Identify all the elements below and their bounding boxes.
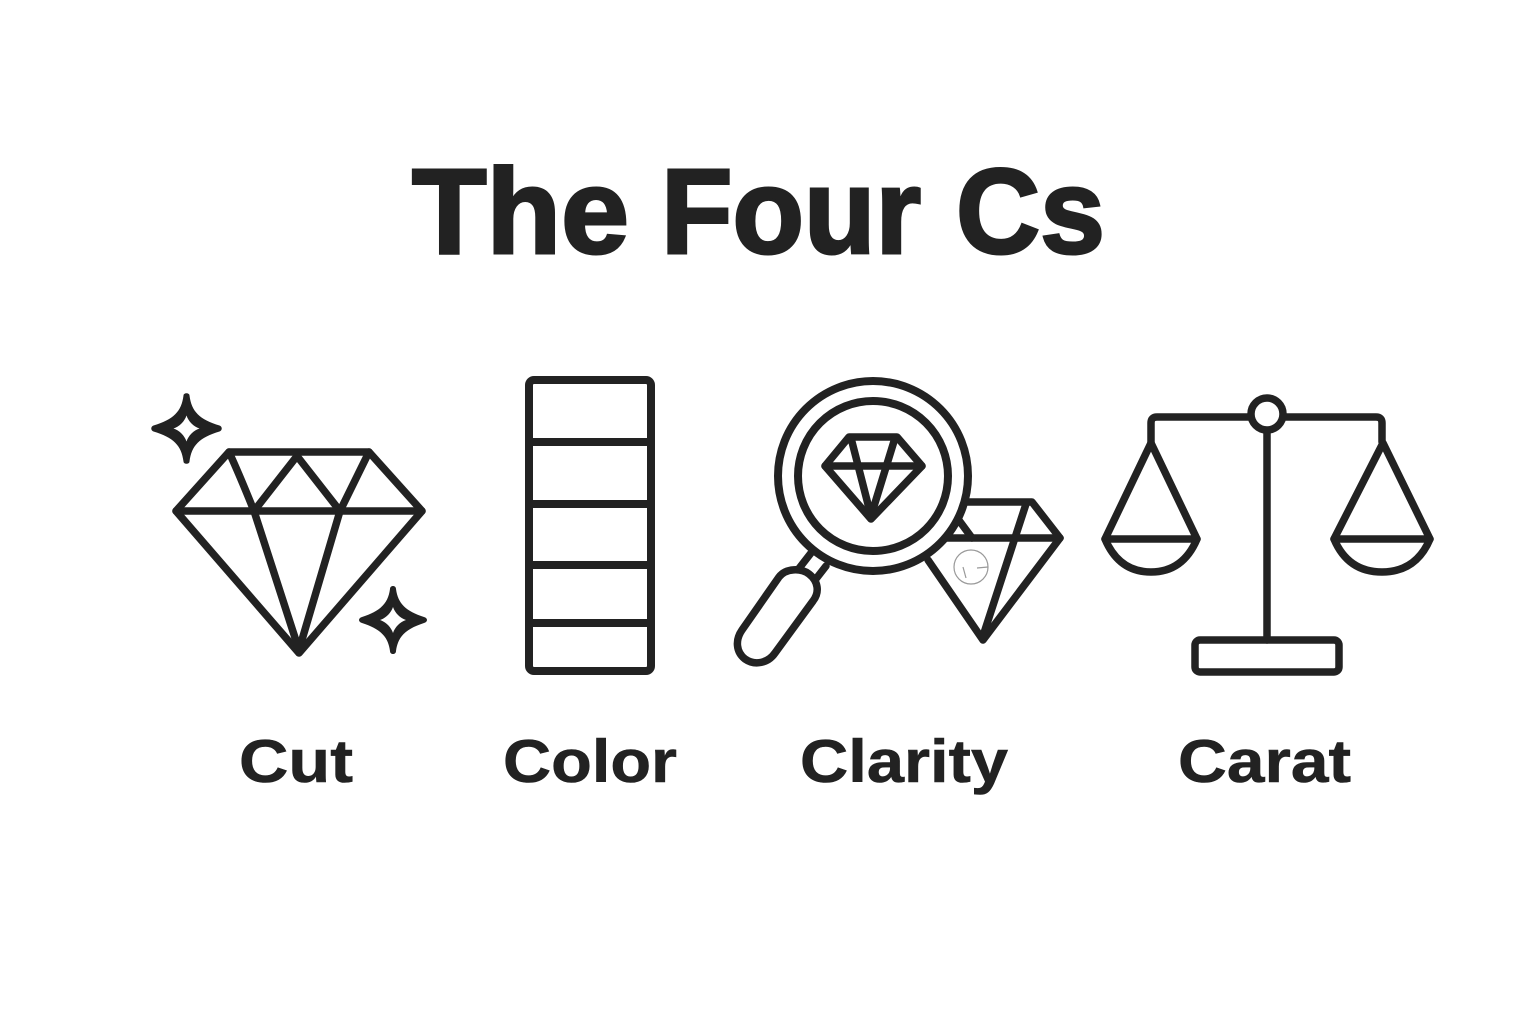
magnifier lens (778, 381, 968, 571)
pivot (1251, 398, 1283, 430)
beam (1151, 417, 1382, 442)
icon: cut diamond with sparkles (151, 393, 427, 654)
post (1263, 430, 1271, 640)
sparkle: upper left (151, 393, 222, 464)
label: Color: Color (503, 728, 677, 795)
icon: carat balance scale (1105, 398, 1430, 672)
inclusion circle (954, 550, 988, 584)
label: Clarity: Clarity (800, 728, 1009, 795)
large diamond behind lens (928, 502, 1060, 640)
left pan (1105, 443, 1197, 572)
right pan (1334, 443, 1430, 572)
title: The (412, 143, 629, 279)
sparkle: lower right (359, 586, 427, 654)
base (1195, 640, 1339, 672)
icon: color scale (529, 380, 651, 671)
title: Four (661, 143, 921, 279)
label: Cut: Cut (239, 728, 353, 795)
diamond outline and facets (176, 452, 422, 653)
icon: clarity magnifier over diamond (737, 381, 1060, 663)
small diamond in lens (825, 437, 922, 519)
title (412, 143, 1105, 279)
magnifier handle (737, 553, 826, 663)
label: Carat: Carat (1178, 728, 1351, 795)
title: Cs (956, 143, 1105, 279)
